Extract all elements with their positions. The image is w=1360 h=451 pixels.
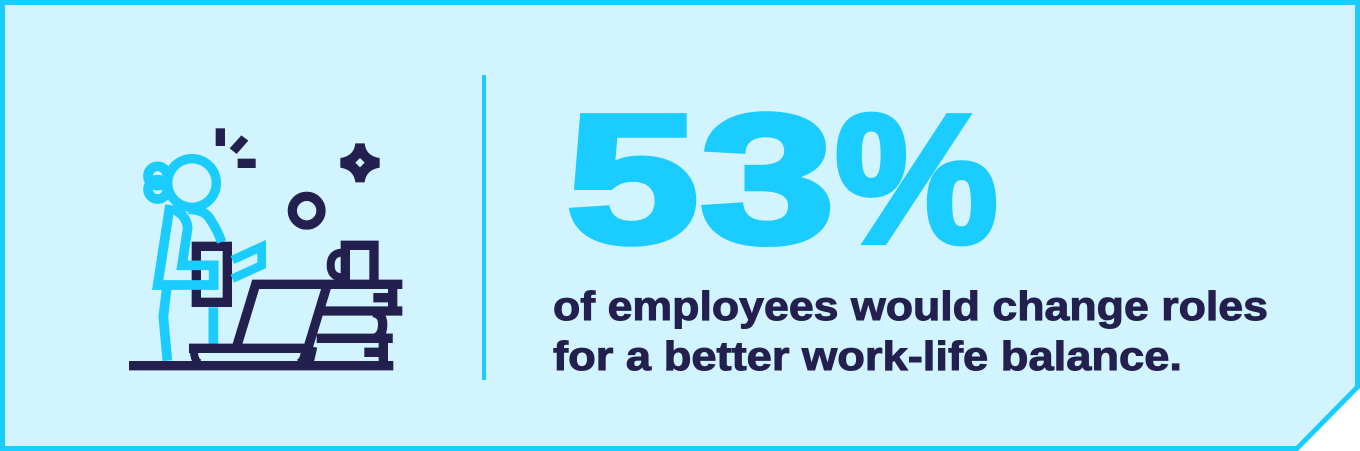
description text bbox=[553, 283, 1268, 379]
icon: person working at a laptop desk bbox=[129, 128, 402, 366]
divider bbox=[482, 75, 486, 380]
icon part: person in cyan bbox=[148, 159, 262, 361]
icon part: sparkle star bbox=[340, 143, 380, 182]
line one: of employees would change roles bbox=[553, 283, 1268, 329]
digit five: 5 bbox=[566, 76, 699, 281]
line two: for a better work-life balance. bbox=[553, 333, 1182, 379]
icon part: idea dashes bbox=[216, 128, 256, 168]
icon part: clipboard bbox=[196, 246, 227, 302]
percent sign: % bbox=[835, 76, 998, 281]
digit three: 3 bbox=[700, 76, 835, 281]
big statistic bbox=[566, 76, 998, 281]
icon part: navy desk objects bbox=[129, 196, 402, 366]
